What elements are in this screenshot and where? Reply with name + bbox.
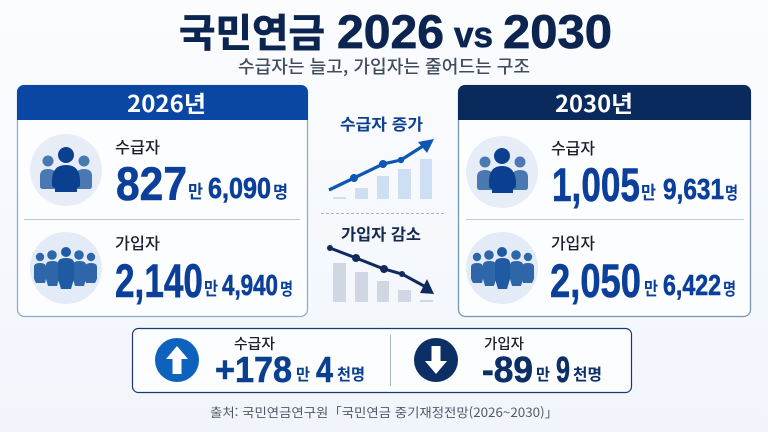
value: 1,005만 9,631명: 1,005 (552, 158, 640, 211)
bar chart: falling subscribers (327, 245, 434, 302)
value: +178만 4천명: 4 (316, 349, 333, 390)
icon: recipients (30, 134, 102, 206)
panel header: 2030년 (458, 85, 751, 120)
label: 가입자: 가입자 (115, 230, 160, 254)
value: 2,050만 6,422명: 명 (723, 275, 736, 300)
bar chart: rising recipients (329, 139, 434, 199)
panel header: 2026년: 2026년 (127, 85, 206, 119)
value: 1,005만 9,631명: 만 (641, 179, 656, 205)
value: 2,140만 4,940명: 4,940 (222, 270, 278, 302)
heading: 가입자 감소: 가입자 감소 (341, 221, 421, 245)
value: -89만 9천명: 9 (556, 349, 570, 390)
icon: up arrow (155, 338, 199, 382)
icon: recipients (466, 136, 538, 208)
value: 1,005만 9,631명: 명 (725, 179, 738, 204)
label: 가입자: 가입자 (551, 230, 595, 254)
value: 2,140만 4,940명: 명 (280, 275, 293, 300)
title: 2030 (503, 5, 612, 58)
heading: 수급자 증가: 수급자 증가 (340, 111, 423, 135)
label: 가입자: 가입자 (484, 333, 524, 354)
value: 2,050만 6,422명: 만 (644, 275, 658, 301)
value: -89만 9천명: -89 (482, 349, 533, 390)
value: -89만 9천명: 만 (536, 361, 550, 385)
icon: subscribers (30, 232, 102, 304)
value: 2,050만 6,422명 (550, 254, 736, 307)
value: 827만 6,090명: 명 (273, 178, 288, 203)
panel: 2026 (17, 85, 308, 316)
value: +178만 4천명: 천명 (337, 361, 365, 385)
title: 2026 (337, 5, 444, 58)
title: 국민연금 (179, 3, 325, 59)
label: 수급자: 수급자 (551, 135, 595, 159)
panel: change summary (132, 328, 632, 392)
icon: down arrow (414, 338, 458, 382)
subtitle: 수급자는 늘고, 가입자는 줄어드는 구조 (238, 53, 530, 79)
panel header: 2030년: 2030년 (555, 85, 633, 119)
value: -89만 9천명 (482, 349, 602, 390)
value: +178만 4천명: +178 (215, 349, 292, 390)
value: 2,050만 6,422명: 6,422 (663, 270, 721, 302)
label: 수급자: 수급자 (115, 134, 160, 158)
value: -89만 9천명: 천명 (573, 361, 602, 385)
title: vs (454, 14, 493, 55)
panel: trend charts (321, 111, 445, 302)
panel header: 2026년 (17, 85, 308, 120)
value: 2,140만 4,940명: 만 (204, 275, 218, 301)
value: 827만 6,090명: 827 (116, 157, 187, 210)
value: 2,140만 4,940명: 2,140 (115, 254, 203, 307)
source: 출처: 국민연금연구원「국민연금 중기재정전망(2026~2030)」 (210, 402, 558, 421)
value: 1,005만 9,631명: 9,631 (663, 174, 724, 206)
title (179, 3, 612, 59)
value: 827만 6,090명: 만 (188, 178, 203, 204)
value: 1,005만 9,631명 (552, 158, 738, 211)
value: 827만 6,090명: 6,090 (208, 173, 271, 205)
panel: 2030 (458, 85, 751, 316)
value: +178만 4천명: 만 (296, 361, 310, 385)
value: 2,050만 6,422명: 2,050 (550, 254, 641, 307)
label: 수급자: 수급자 (234, 333, 275, 354)
value: 2,140만 4,940명 (115, 254, 293, 307)
value: +178만 4천명 (215, 349, 365, 390)
value: 827만 6,090명 (116, 157, 288, 210)
icon: subscribers (466, 232, 538, 304)
